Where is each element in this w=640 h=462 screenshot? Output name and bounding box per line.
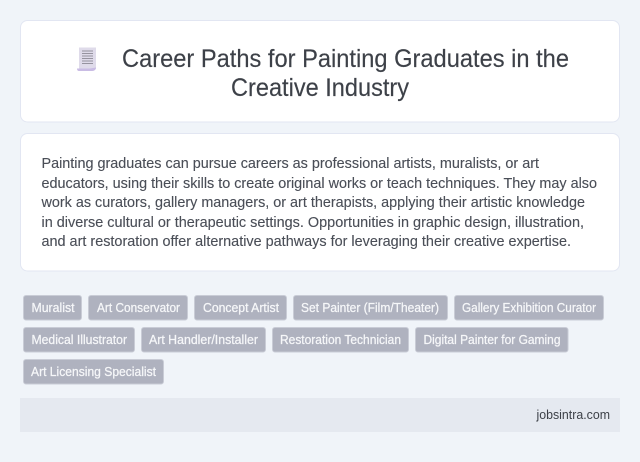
tag: Medical Illustrator bbox=[24, 328, 134, 352]
text block: description bbox=[41, 156, 597, 250]
panel: description bbox=[20, 134, 620, 271]
title bbox=[122, 45, 569, 102]
footer bbox=[20, 398, 620, 432]
tag: Concept Artist: Concept Artist bbox=[203, 301, 280, 315]
text block: description: work as curators, gallery managers, or art therapists, applying their artistic knowledge bbox=[41, 195, 585, 211]
tag: Gallery Exhibition Curator bbox=[454, 296, 604, 320]
tag: Art Conservator: Art Conservator bbox=[97, 301, 180, 315]
tag list bbox=[24, 296, 604, 384]
panel: header bbox=[20, 20, 620, 122]
title: Career Paths for Painting Graduates in the bbox=[122, 45, 569, 73]
tag: Art Conservator bbox=[88, 296, 188, 320]
text block: description: and art restoration offer alternative pathways for leveraging their creative expertise. bbox=[42, 234, 571, 250]
text block: description: educators, using their skills to create original works or teach techniques. They may also bbox=[42, 176, 597, 192]
title: Creative Industry bbox=[231, 74, 409, 102]
tag: Muralist bbox=[24, 296, 82, 320]
tag: Concept Artist bbox=[194, 296, 286, 320]
tag: Art Handler/Installer bbox=[142, 328, 266, 352]
tag: Medical Illustrator: Medical Illustrator bbox=[32, 333, 127, 347]
tag: Gallery Exhibition Curator: Gallery Exhibition Curator bbox=[462, 301, 596, 315]
text block: description: Painting graduates can pursue careers as professional artists, muralists, or art bbox=[42, 156, 539, 172]
tag: Muralist: Muralist bbox=[32, 301, 75, 315]
tag: Restoration Technician bbox=[272, 328, 408, 352]
tag: Art Licensing Specialist: Art Licensing Specialist bbox=[31, 365, 157, 379]
footer source text: jobsintra.com bbox=[536, 408, 610, 422]
text block: description: in diverse cultural or therapeutic settings. Opportunities in graphic design, illustration, bbox=[42, 215, 584, 231]
tag: Art Handler/Installer: Art Handler/Installer bbox=[149, 333, 258, 347]
tag: Set Painter: Set Painter (Film/Theater) bbox=[301, 301, 439, 315]
icon: document scroll bbox=[77, 48, 96, 71]
tag: Digital Painter for Gaming bbox=[416, 328, 568, 352]
tag: Restoration Technician: Restoration Technician bbox=[280, 333, 401, 347]
tag: Set Painter bbox=[294, 296, 448, 320]
tag: Digital Painter for Gaming: Digital Painter for Gaming bbox=[424, 333, 561, 347]
tag: Art Licensing Specialist bbox=[24, 360, 164, 384]
